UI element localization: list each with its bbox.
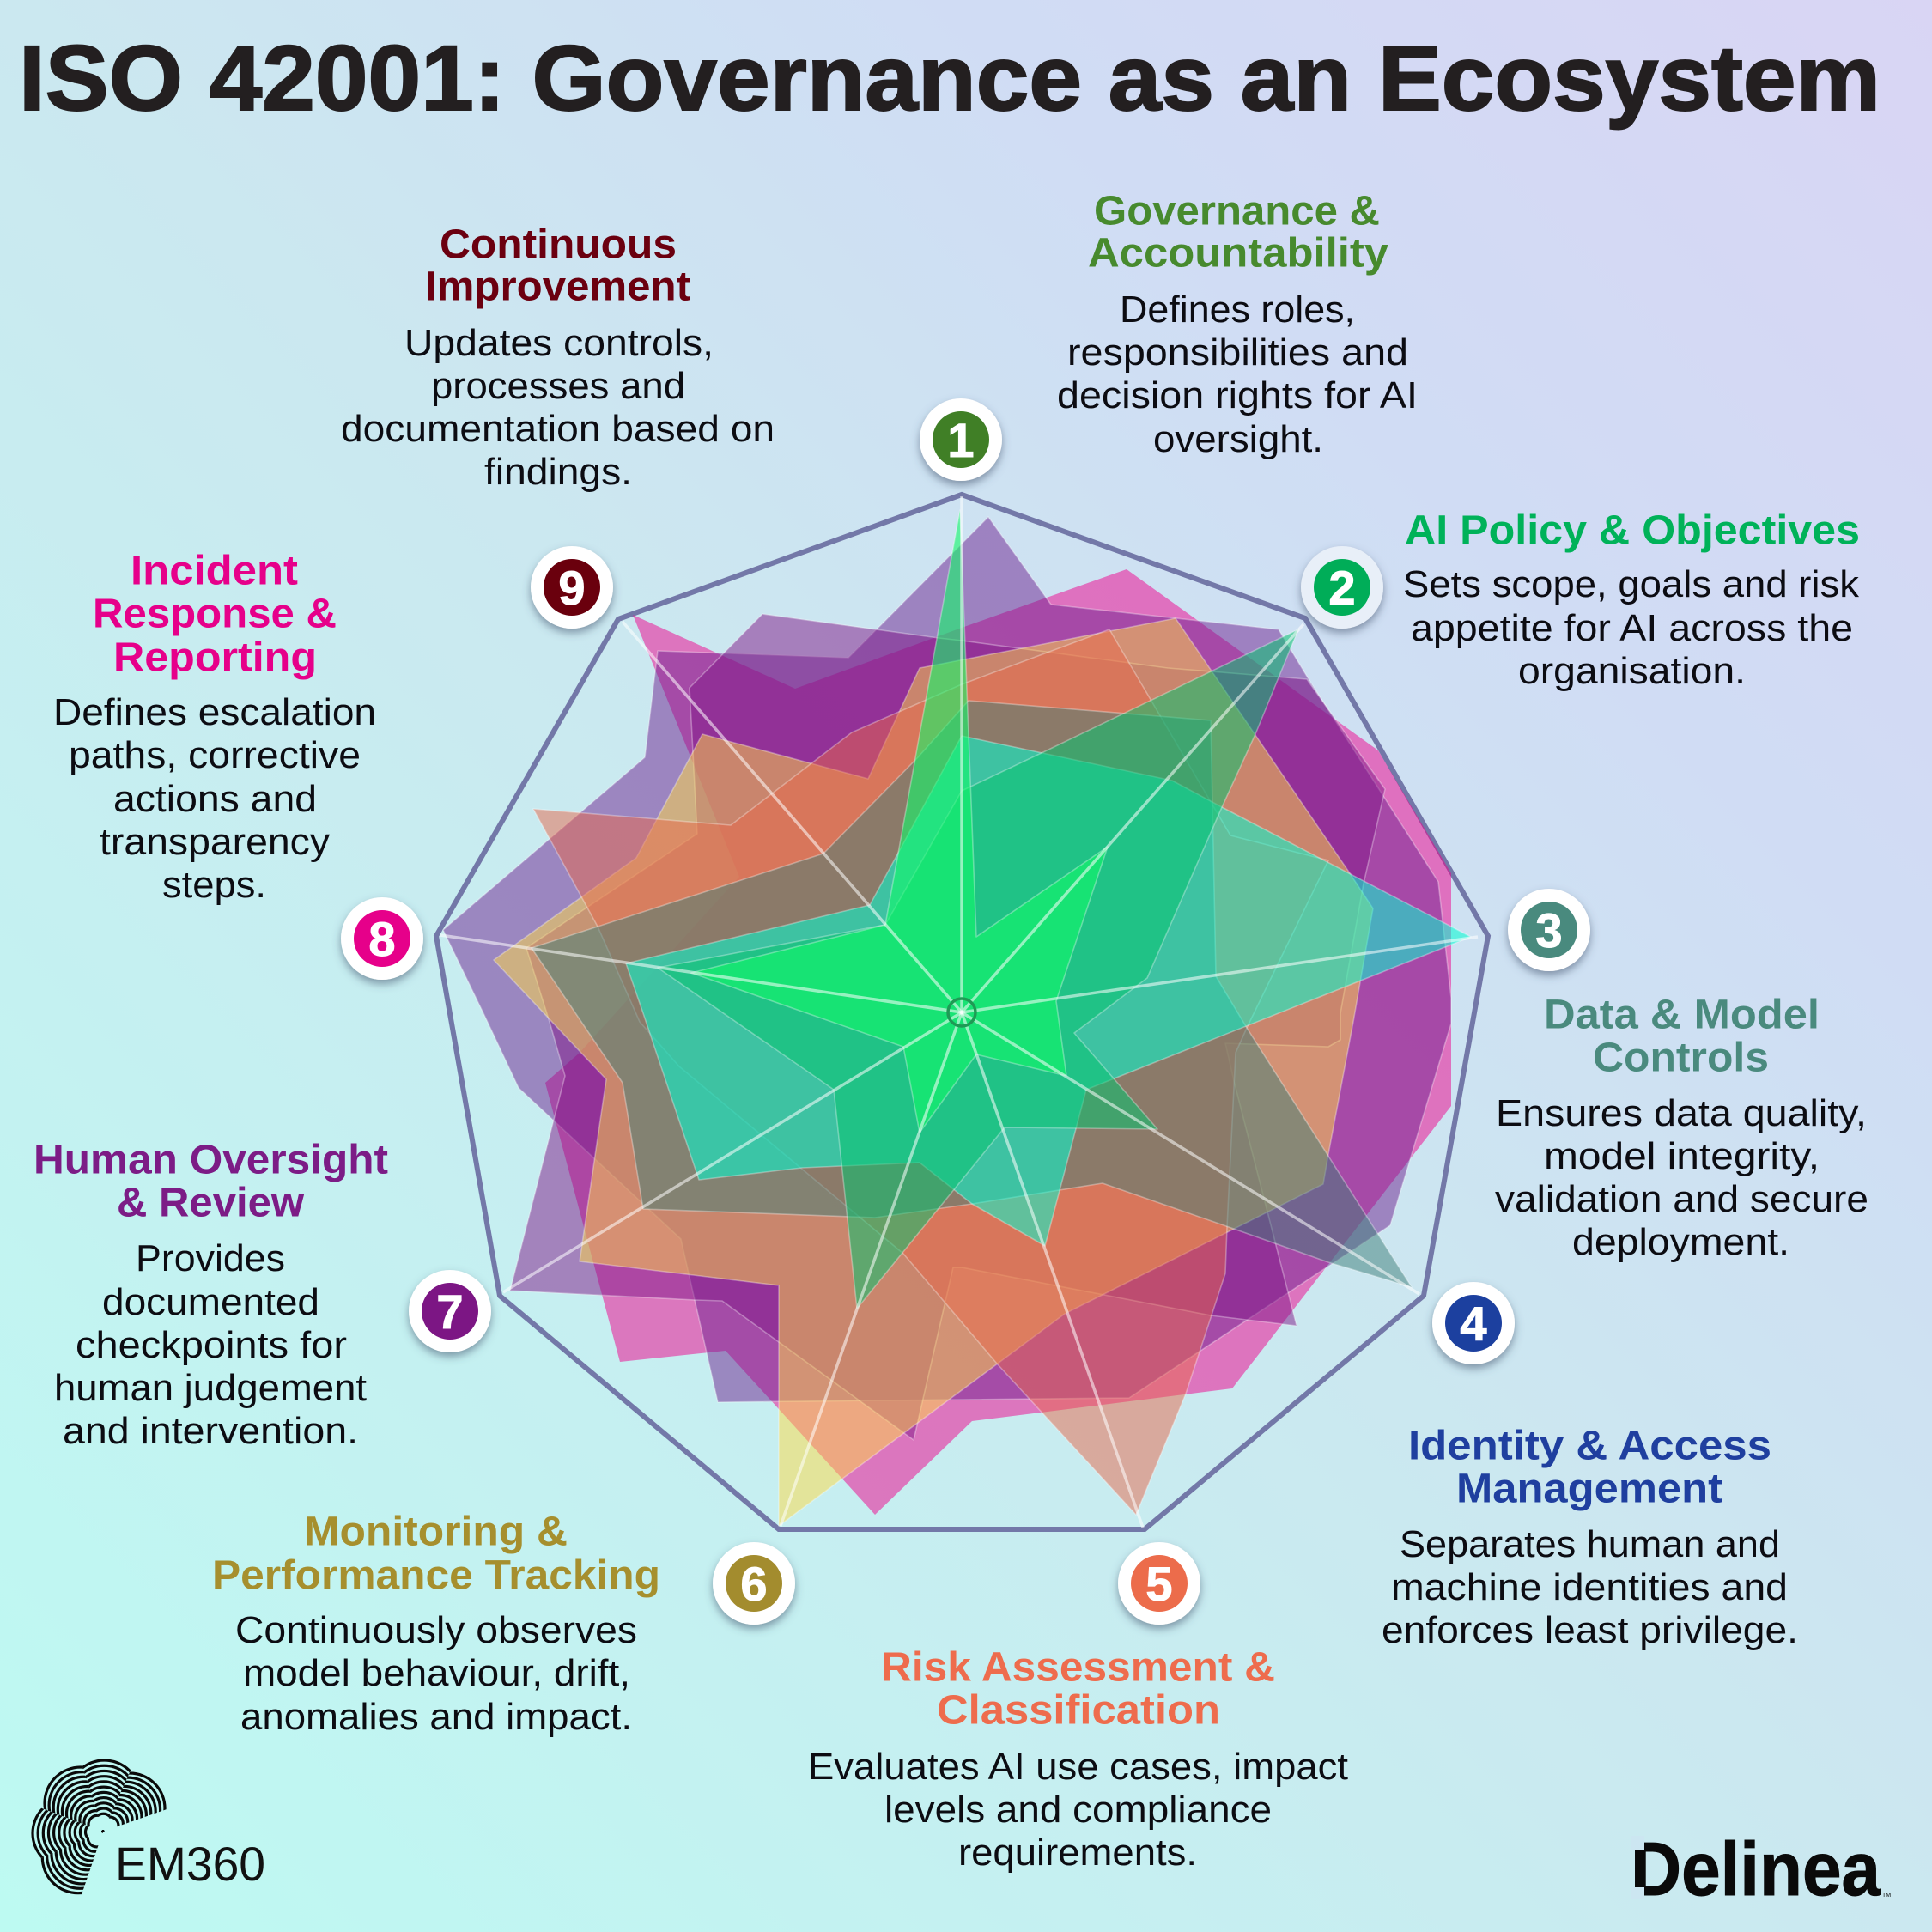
text block: data and model controls: deployment. bbox=[1572, 1221, 1789, 1263]
text block: governance and accountability: decision rights for AI bbox=[1057, 374, 1418, 416]
text block: identity and access management: Management bbox=[1456, 1467, 1722, 1511]
text block: identity and access management: enforces least privilege. bbox=[1382, 1609, 1798, 1651]
logo: EM360 bbox=[33, 1760, 265, 1893]
text block: human oversight and review: human judgement bbox=[54, 1367, 367, 1409]
overlapping radar areas bbox=[443, 510, 1471, 1526]
text block: human oversight and review: documented bbox=[102, 1281, 319, 1323]
text block: data and model controls: Data & Model bbox=[1544, 993, 1820, 1037]
text block: identity and access management: Separates human and bbox=[1400, 1523, 1780, 1565]
text block: governance and accountability: Accountability bbox=[1088, 230, 1388, 276]
text block: risk assessment and classification bbox=[808, 1645, 1348, 1874]
text block: governance and accountability: Governance & bbox=[1094, 189, 1380, 234]
badge 5 bbox=[1118, 1542, 1200, 1625]
text block: human oversight and review: Provides bbox=[136, 1237, 285, 1279]
text block: data and model controls: validation and secure bbox=[1495, 1178, 1868, 1220]
text block: continuous improvement: Updates controls, bbox=[404, 322, 714, 364]
text block: monitoring and performance tracking: model behaviour, drift, bbox=[243, 1652, 630, 1694]
text block: incident response and reporting: Response & bbox=[93, 591, 337, 637]
icon: EM360 concentric fan mark bbox=[33, 1760, 165, 1893]
text block: AI policy and objectives: AI Policy & Objectives bbox=[1405, 508, 1860, 553]
badge 8: 8 bbox=[368, 912, 396, 966]
text block: monitoring and performance tracking: Monitoring & bbox=[304, 1510, 568, 1554]
text block: monitoring and performance tracking: anomalies and impact. bbox=[240, 1696, 632, 1738]
text block: identity and access management bbox=[1382, 1424, 1798, 1651]
radar chart bbox=[436, 495, 1488, 1529]
text block: governance and accountability: responsibilities and bbox=[1067, 331, 1408, 374]
area: AI policy bbox=[658, 629, 1298, 1309]
area: risk assessment bbox=[533, 629, 1328, 1515]
text block: continuous improvement: processes and bbox=[431, 365, 685, 407]
badge 5: 5 bbox=[1145, 1557, 1173, 1611]
text block: incident response and reporting: transparency bbox=[100, 821, 330, 863]
badge 6: 6 bbox=[740, 1557, 768, 1611]
text block: governance and accountability bbox=[1057, 189, 1418, 460]
badge 2 bbox=[1301, 546, 1383, 629]
area: data and model bbox=[532, 701, 1412, 1287]
text block: incident response and reporting: steps. bbox=[162, 864, 266, 906]
text block: data and model controls: Controls bbox=[1593, 1036, 1769, 1080]
badge 9: 9 bbox=[558, 561, 586, 615]
text block: data and model controls: model integrity, bbox=[1544, 1135, 1820, 1177]
area: human oversight base bbox=[443, 517, 1451, 1402]
text block: governance and accountability: Defines roles, bbox=[1120, 289, 1355, 331]
area: cyan controls bbox=[626, 736, 1471, 1246]
badge 4 bbox=[1432, 1282, 1515, 1364]
text block: incident response and reporting: Defines escalation bbox=[53, 691, 376, 733]
chart spokes bbox=[440, 496, 1478, 1528]
logo: Delinea: TM bbox=[1882, 1893, 1891, 1899]
badge 3: 3 bbox=[1535, 903, 1563, 957]
text block: data and model controls: Ensures data quality, bbox=[1496, 1092, 1867, 1134]
wordmark: EM360: EM360 bbox=[115, 1837, 265, 1891]
text block: incident response and reporting: Reporting bbox=[113, 635, 317, 680]
title: ISO 42001: Governance as an Ecosystem bbox=[19, 26, 1880, 130]
text block: AI policy and objectives: organisation. bbox=[1518, 650, 1746, 692]
text block: monitoring and performance tracking: Performance Tracking bbox=[212, 1552, 660, 1599]
text block: AI policy and objectives: Sets scope, goals and risk bbox=[1403, 563, 1860, 605]
text block: incident response and reporting bbox=[53, 548, 376, 906]
text block: risk assessment and classification: levels and compliance bbox=[884, 1789, 1272, 1831]
text block: human oversight and review: checkpoints for bbox=[76, 1324, 347, 1366]
badge 8 bbox=[341, 897, 423, 980]
badge 3 bbox=[1508, 889, 1590, 971]
text block: continuous improvement: Improvement bbox=[425, 264, 690, 309]
badge 2: 2 bbox=[1328, 561, 1356, 615]
area: governance star bbox=[691, 510, 1108, 1133]
text block: risk assessment and classification: Classification bbox=[937, 1688, 1220, 1733]
text block: incident response and reporting: paths, corrective bbox=[69, 734, 361, 776]
text block: incident response and reporting: actions and bbox=[113, 778, 317, 820]
chart outer nonagon frame bbox=[436, 495, 1488, 1529]
badge 9 bbox=[531, 546, 613, 629]
text block: continuous improvement: findings. bbox=[484, 451, 632, 493]
text block: governance and accountability: oversight. bbox=[1153, 418, 1323, 460]
text block: continuous improvement bbox=[341, 222, 775, 493]
badge 1: 1 bbox=[947, 413, 975, 467]
text block: human oversight and review bbox=[33, 1137, 388, 1452]
text block: AI policy and objectives bbox=[1403, 508, 1860, 692]
text block: risk assessment and classification: Risk Assessment & bbox=[881, 1645, 1275, 1690]
text block: human oversight and review: Human Oversight bbox=[33, 1137, 388, 1183]
text block: data and model controls bbox=[1495, 993, 1868, 1263]
logo: Delinea: Delinea bbox=[1631, 1826, 1881, 1911]
badge 6 bbox=[713, 1542, 795, 1625]
area: incident response bbox=[545, 569, 1451, 1515]
text block: monitoring and performance tracking: Continuously observes bbox=[235, 1609, 637, 1651]
text block: continuous improvement: Continuous bbox=[440, 222, 677, 268]
text block: monitoring and performance tracking bbox=[212, 1510, 660, 1738]
badge 7 bbox=[409, 1270, 491, 1352]
text block: incident response and reporting: Incident bbox=[131, 548, 298, 594]
text block: risk assessment and classification: requirements. bbox=[958, 1832, 1197, 1874]
text block: identity and access management: Identity & Access bbox=[1408, 1424, 1771, 1468]
text block: AI policy and objectives: appetite for AI across the bbox=[1411, 607, 1853, 649]
area: human oversight bbox=[510, 614, 1385, 1440]
badge 4: 4 bbox=[1460, 1297, 1487, 1351]
text block: identity and access management: machine identities and bbox=[1391, 1566, 1788, 1608]
text block: human oversight and review: & Review bbox=[117, 1180, 305, 1226]
area: monitoring bbox=[494, 618, 1373, 1526]
text block: continuous improvement: documentation based on bbox=[341, 408, 775, 450]
badge 1 bbox=[920, 398, 1002, 481]
text block: human oversight and review: and intervention. bbox=[63, 1410, 358, 1452]
text block: risk assessment and classification: Evaluates AI use cases, impact bbox=[808, 1746, 1348, 1788]
chart centre marker bbox=[948, 999, 975, 1026]
badge 7: 7 bbox=[436, 1285, 464, 1339]
